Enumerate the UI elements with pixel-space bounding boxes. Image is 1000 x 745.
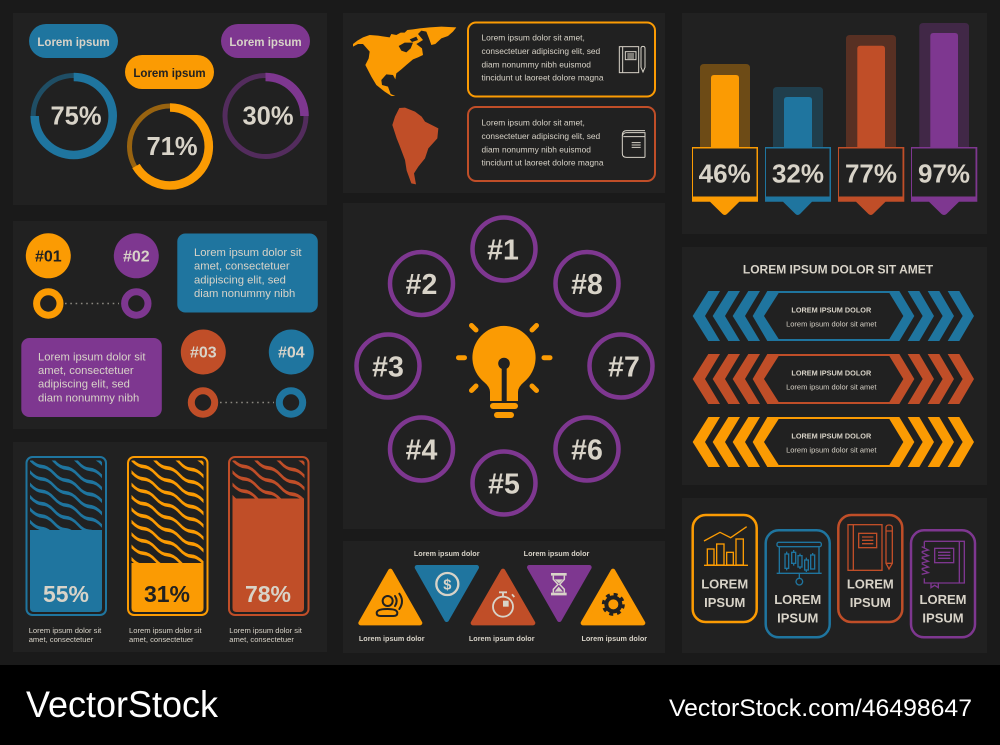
triangle labels: [359, 549, 647, 643]
item #1: #1: [487, 234, 519, 266]
triangle: gear: [583, 571, 643, 623]
panel: icon cards: [682, 498, 987, 653]
blue text box: adipiscing elit, sed: [194, 274, 286, 286]
purple text box: [21, 338, 162, 417]
badge #03: #03: [190, 345, 217, 362]
item #6: [556, 418, 618, 480]
blue text box: diam nonummy nibh: [194, 288, 295, 300]
banner text: orange: LOREM IPSUM DOLOR: [791, 432, 872, 441]
item #2: #2: [406, 269, 437, 301]
footer url: VectorStock.com/46498647: [669, 695, 972, 722]
gauge 31%: 31%: [144, 581, 190, 607]
connector 03-04: [191, 391, 303, 414]
ring 75%: 75%: [50, 102, 102, 130]
connector 01-02: [37, 292, 148, 315]
bar 32%: 32%: [772, 159, 824, 189]
captions: Lorem ipsum dolor sit: [29, 626, 102, 635]
ring 75%: [33, 76, 114, 156]
text box: red: [468, 107, 655, 181]
triangle labels: Lorem ipsum dolor: [359, 634, 425, 643]
text box: orange: Lorem ipsum dolor sit amet,: [482, 33, 585, 43]
map: south america: [392, 108, 438, 184]
badge #02: [114, 233, 159, 278]
ring 71%: 71%: [146, 133, 198, 161]
banner text: blue: LOREM IPSUM DOLOR: [791, 306, 872, 315]
purple pill label: [221, 24, 310, 58]
badge #04: [269, 330, 314, 374]
panel: numbered steps: [13, 221, 327, 429]
icon: notebook and pencil: [619, 46, 645, 73]
triangle: person speaking: [361, 571, 420, 623]
card: chart: IPSUM: [704, 595, 745, 610]
banner: orange: [693, 417, 974, 467]
badge #04: #04: [278, 345, 305, 362]
card: presentation board: [766, 530, 830, 637]
banner text: orange: [786, 432, 877, 454]
purple text box: Lorem ipsum dolor sit: [38, 351, 146, 363]
card: notebook: IPSUM: [850, 595, 891, 610]
orange pill label: Lorem ipsum: [133, 68, 206, 80]
triangle: stopwatch: [473, 571, 533, 623]
triangle labels: Lorem ipsum dolor: [414, 549, 480, 558]
panel: progress rings: [13, 13, 327, 205]
badge #01: [26, 233, 71, 278]
gauge 78%: 78%: [245, 581, 291, 607]
item #6: #6: [571, 434, 603, 466]
panel: americas map: [343, 13, 665, 193]
banner text: blue: [786, 306, 877, 328]
item #3: [356, 334, 420, 398]
badge #01: #01: [35, 248, 62, 266]
banner text: orange: Lorem ipsum dolor sit amet: [786, 446, 877, 454]
item #1: [472, 218, 536, 280]
item #8: [556, 252, 618, 315]
captions: amet, consectetuer: [229, 635, 294, 644]
badge #03: [181, 330, 226, 374]
triangle labels: Lorem ipsum dolor: [469, 634, 535, 643]
item #8: #8: [571, 269, 603, 301]
captions: Lorem ipsum dolor sit: [229, 626, 303, 635]
blue text box: Lorem ipsum dolor sit: [194, 247, 302, 259]
gauge 55%: [26, 456, 107, 616]
ring 71%: [130, 106, 210, 187]
bar 32%: [765, 87, 831, 215]
banner text: red: [786, 369, 877, 392]
map: north america: [353, 27, 456, 96]
blue text box: [177, 234, 318, 312]
purple text box: diam nonummy nibh: [38, 392, 139, 404]
item #5: #5: [488, 468, 520, 500]
banner: blue: [693, 291, 974, 341]
panel: bar chart: [682, 13, 987, 234]
banner text: red: LOREM IPSUM DOLOR: [791, 369, 872, 378]
text box: orange: tincidunt ut laoreet dolore magna: [482, 73, 604, 83]
bar 97%: 97%: [918, 159, 970, 189]
ring 30%: [225, 76, 306, 156]
card: notebook: [838, 515, 902, 622]
triangle: dollar coin: $: [443, 577, 451, 593]
panel: triangle icons: [343, 541, 665, 653]
gauge 78%: [228, 456, 310, 616]
triangle labels: Lorem ipsum dolor: [581, 634, 647, 643]
card: chart: [693, 515, 757, 622]
bar 97%: [911, 23, 977, 215]
item #7: [590, 334, 652, 398]
bar 77%: [838, 35, 904, 215]
captions: Lorem ipsum dolor sit: [129, 626, 202, 635]
panel: idea ring: [343, 203, 665, 529]
text box: orange: diam nonummy nibh euismod: [482, 59, 591, 69]
banner text: blue: Lorem ipsum dolor sit amet: [786, 320, 877, 328]
text box: red: Lorem ipsum dolor sit amet,: [482, 118, 585, 128]
card: chart: LOREM: [701, 576, 748, 592]
icon: closed book: [622, 131, 645, 157]
item #4: #4: [406, 434, 437, 466]
badge #02: #02: [123, 248, 150, 266]
card: presentation board: LOREM: [774, 592, 821, 607]
bar 77%: 77%: [845, 159, 897, 189]
text box: red: diam nonummy nibh euismod: [482, 144, 591, 154]
ring 30%: 30%: [242, 102, 294, 130]
bar 46%: 46%: [699, 159, 751, 189]
card: spiral notebook: LOREM: [920, 592, 966, 607]
item #2: [390, 252, 453, 315]
text box: orange: consectetuer adipiscing elit, sed: [482, 46, 601, 56]
purple text box: amet, consectetuer: [38, 365, 134, 377]
footer brand: VectorStock: [26, 684, 218, 725]
blue text box: amet, consectetuer: [194, 261, 290, 273]
blue pill label: Lorem ipsum: [37, 37, 110, 49]
text box: red: tincidunt ut laoreet dolore magna: [482, 158, 604, 168]
card: spiral notebook: [911, 530, 975, 637]
triangle labels: Lorem ipsum dolor: [524, 549, 589, 558]
card: spiral notebook: IPSUM: [922, 610, 964, 626]
panel: chevron banners: [682, 247, 987, 485]
purple pill label: Lorem ipsum: [229, 37, 302, 49]
card: notebook: LOREM: [847, 576, 894, 592]
gauge 55%: 55%: [43, 581, 89, 607]
panel: wave fill gauges: [26, 456, 310, 643]
triangle: dollar coin: [417, 567, 477, 620]
banner: red: [693, 354, 974, 404]
purple text box: adipiscing elit, sed: [38, 379, 130, 391]
captions: amet, consectetuer: [29, 635, 94, 644]
item #5: [472, 452, 536, 514]
icon: light bulb: [458, 326, 550, 418]
text box: orange: [468, 22, 655, 96]
item #7: #7: [608, 352, 640, 384]
bar 46%: [692, 64, 758, 215]
blue pill label: [29, 24, 118, 58]
item #4: [390, 418, 453, 480]
captions: [29, 626, 303, 644]
captions: amet, consectetuer: [129, 635, 194, 644]
text box: red: consectetuer adipiscing elit, sed: [482, 131, 601, 141]
banner text: red: Lorem ipsum dolor sit amet: [786, 382, 877, 392]
card: presentation board: IPSUM: [777, 610, 818, 626]
footer band: [0, 665, 1000, 745]
gauge 31%: [127, 456, 208, 616]
heading: LOREM IPSUM DOLOR SIT AMET: [743, 262, 934, 276]
orange pill label: [125, 55, 214, 89]
triangle: hourglass: [529, 567, 589, 620]
item #3: #3: [372, 352, 404, 384]
